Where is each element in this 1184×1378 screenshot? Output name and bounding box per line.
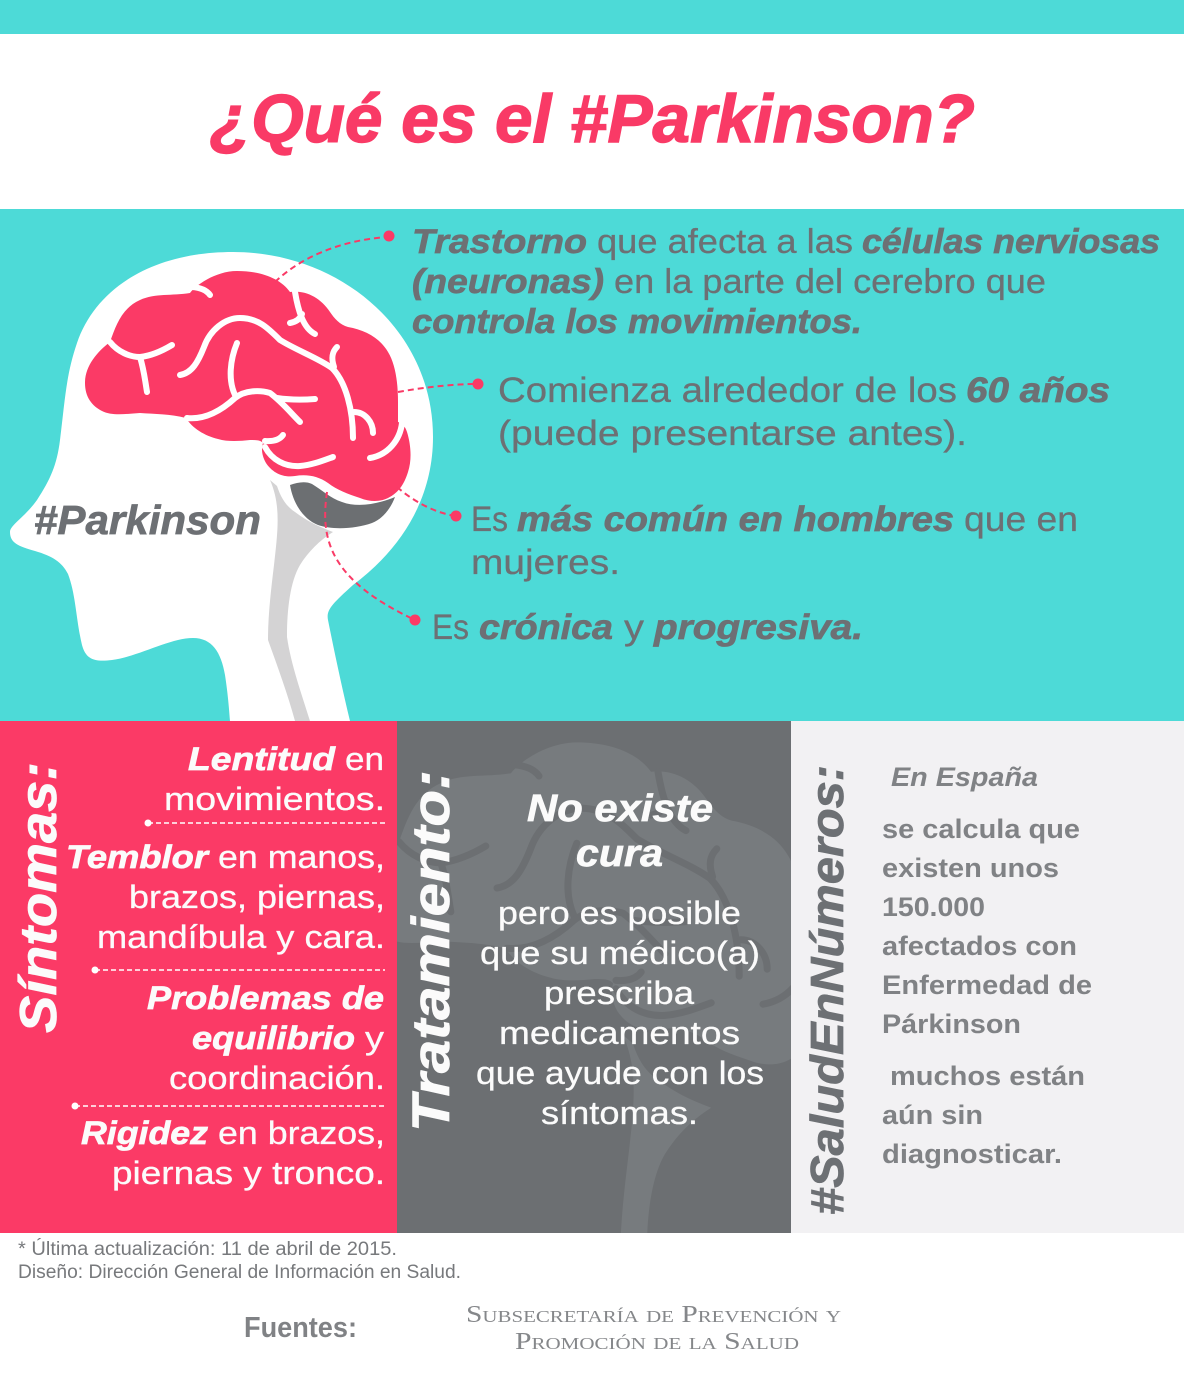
panel: tratamiento xyxy=(397,721,791,1233)
statistic text xyxy=(882,762,1092,1169)
fact: sex xyxy=(471,500,1078,582)
footer notes xyxy=(18,1238,461,1283)
symptom: equilibrio xyxy=(147,980,385,1096)
treatment headline: cura xyxy=(576,833,663,875)
fact: chronic: crónica xyxy=(479,608,613,647)
panel: síntomas xyxy=(0,721,397,1233)
fact: age: Comienza alrededor de los xyxy=(498,371,957,410)
brain xyxy=(85,271,411,501)
symptom: rigidez: Rigidez xyxy=(81,1115,209,1151)
treatment headline: No existe xyxy=(527,788,713,830)
heading: tratamiento: Tratamiento: xyxy=(402,770,461,1132)
statistic text: aún sin xyxy=(882,1100,983,1130)
symptom: rigidez: piernas y tronco. xyxy=(112,1155,385,1191)
fact: age: 60 años xyxy=(966,371,1110,410)
head silhouette xyxy=(10,252,433,721)
treatment text xyxy=(476,895,764,1131)
panel: salud en números xyxy=(791,721,1184,1233)
symptom: temblor: mandíbula y cara. xyxy=(97,919,385,955)
statistic text: En España xyxy=(891,762,1038,792)
symptom: lentitud: en xyxy=(345,741,384,777)
fact: definition: Trastorno xyxy=(412,223,587,261)
fact: chronic xyxy=(432,608,863,647)
fact: definition: (neuronas) xyxy=(412,263,604,301)
callout lines xyxy=(275,230,484,626)
source organization xyxy=(466,1302,841,1355)
source organization: Subsecretaría de Prevención y xyxy=(466,1302,841,1328)
title: ¿Qué es el #Parkinson? xyxy=(210,81,975,157)
symptom: temblor: brazos, piernas, xyxy=(129,879,385,915)
symptom: rigidez xyxy=(81,1115,385,1191)
fact: chronic: Es xyxy=(432,608,469,647)
statistic text: Enfermedad de xyxy=(882,970,1092,1000)
fact: sex: Es xyxy=(471,500,508,539)
statistic text: existen unos xyxy=(882,853,1059,883)
symptom: equilibrio: equilibrio xyxy=(192,1020,355,1056)
footer notes: Diseño: Dirección General de Información en Salud. xyxy=(18,1262,461,1283)
heading: salud en números: #SaludEnNúmeros: xyxy=(801,765,853,1215)
symptom: temblor xyxy=(66,839,385,955)
treatment text: pero es posible xyxy=(498,895,741,931)
symptom: rigidez: en brazos, xyxy=(218,1115,385,1151)
treatment text: medicamentos xyxy=(499,1015,740,1051)
symptom: temblor: Temblor xyxy=(66,839,211,875)
symptom: lentitud: Lentitud xyxy=(188,741,336,777)
symptom: lentitud xyxy=(164,741,385,817)
symptom: equilibrio: Problemas de xyxy=(147,980,384,1016)
statistic text: 150.000 xyxy=(882,892,985,922)
fact: sex: más común en hombres xyxy=(517,500,954,539)
background brain xyxy=(397,742,791,1233)
treatment text: que ayude con los xyxy=(476,1055,764,1091)
sources label: Fuentes: xyxy=(244,1312,357,1344)
statistic text: Párkinson xyxy=(882,1009,1021,1039)
statistic text: muchos están xyxy=(890,1061,1085,1091)
brain folds xyxy=(110,287,402,466)
cerebellum xyxy=(290,482,395,528)
symptom: lentitud: movimientos. xyxy=(164,781,385,817)
panel: what is Parkinson xyxy=(0,209,1184,721)
treatment text: que su médico(a) xyxy=(480,935,760,971)
fact: sex: que en xyxy=(964,500,1078,539)
fact: definition: células nerviosas xyxy=(862,223,1160,261)
heading: síntomas: Síntomas: xyxy=(10,762,68,1033)
brain stem xyxy=(268,480,333,721)
treatment headline xyxy=(527,788,713,875)
statistic text: se calcula que xyxy=(882,814,1080,844)
statistic text: diagnosticar. xyxy=(882,1139,1062,1169)
footer notes: * Última actualización: 11 de abril de 2015. xyxy=(18,1238,397,1260)
treatment text: prescriba xyxy=(544,975,695,1011)
fact: definition: controla los movimientos. xyxy=(412,303,862,341)
source organization: Promoción de la Salud xyxy=(515,1329,799,1355)
fact: chronic: progresiva. xyxy=(653,608,863,647)
treatment text: síntomas. xyxy=(541,1095,698,1131)
fact: definition: en la parte del cerebro que xyxy=(614,263,1046,301)
statistic text: afectados con xyxy=(882,931,1077,961)
top band xyxy=(0,0,1184,34)
symptom: temblor: en manos, xyxy=(218,839,385,875)
fact: age: (puede presentarse antes). xyxy=(498,414,967,453)
head label: #Parkinson xyxy=(34,497,261,543)
symptom: equilibrio: y xyxy=(365,1020,385,1056)
fact: sex: mujeres. xyxy=(471,543,620,582)
fact: chronic: y xyxy=(624,608,645,647)
fact: definition xyxy=(412,223,1160,341)
fact: age xyxy=(498,371,1110,453)
fact: definition: que afecta a las xyxy=(597,223,853,261)
illustration: head with brain xyxy=(10,230,484,721)
symptom: equilibrio: coordinación. xyxy=(169,1060,385,1096)
